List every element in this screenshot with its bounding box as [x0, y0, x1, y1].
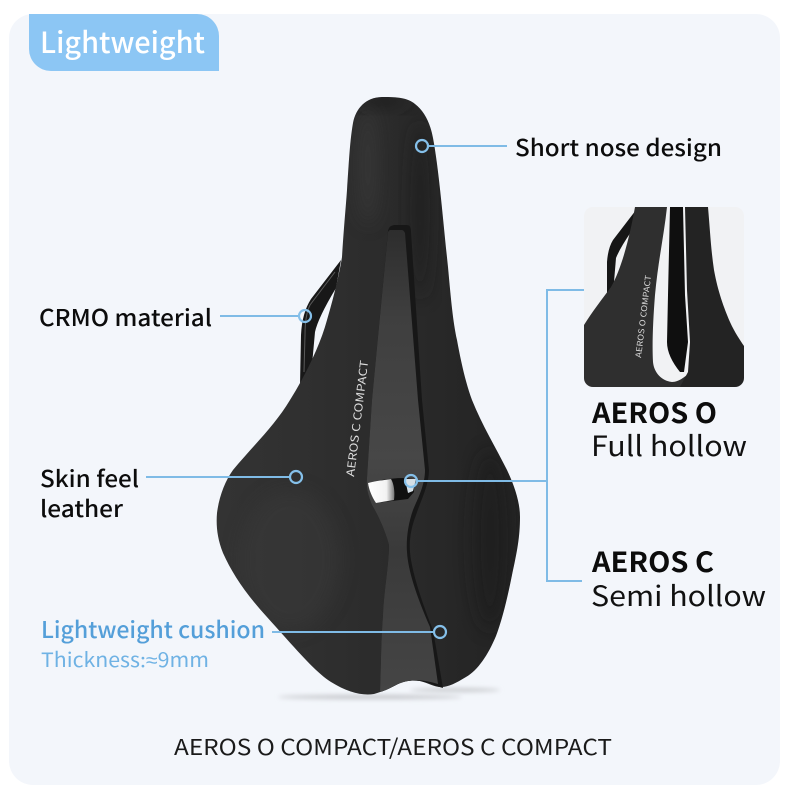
saddle model text: AEROS C COMPACT — [342, 359, 372, 477]
callout: lightweight cushion: Thickness: ≈9mm — [41, 644, 209, 673]
callout: short nose design — [416, 129, 722, 163]
callout: lightweight cushion: Lightweight cushion — [41, 611, 265, 645]
inset: AEROS O full hollow photo — [584, 207, 744, 387]
inset rail — [607, 212, 634, 292]
callout: short nose design: Short nose design — [515, 129, 722, 163]
callout bracket: hollow variants — [405, 290, 584, 581]
callout: skin feel leather: Skin feel — [40, 460, 139, 494]
callout: CRMO material: CRMO material — [39, 299, 212, 333]
label: AEROS C semi hollow: AEROS C — [591, 541, 714, 581]
inset left shell — [584, 207, 690, 387]
saddle shell — [216, 97, 520, 694]
inset model text: AEROS O COMPACT — [633, 274, 654, 358]
centre channel — [367, 225, 443, 692]
callout: CRMO material — [39, 299, 311, 333]
saddle shadow — [278, 695, 462, 699]
label: AEROS C semi hollow: Semi hollow — [591, 575, 766, 615]
icon: saddle rail — [300, 260, 341, 385]
label: AEROS O full hollow — [591, 392, 747, 465]
label: AEROS C semi hollow — [591, 541, 766, 615]
tag: Lightweight: Lightweight — [40, 20, 206, 62]
label: AEROS O full hollow: Full hollow — [591, 425, 747, 465]
saddle illustration — [200, 90, 540, 710]
callout: skin feel leather — [40, 460, 302, 524]
tag: Lightweight — [29, 14, 219, 71]
callout: lightweight cushion — [41, 611, 446, 673]
hollow window — [368, 478, 414, 503]
caption: AEROS O COMPACT/AEROS C COMPACT — [174, 730, 612, 762]
inset centre strut — [667, 207, 688, 372]
callout: skin feel leather: leather — [40, 490, 124, 524]
label: AEROS O full hollow: AEROS O — [591, 392, 717, 432]
inset right shell — [680, 207, 744, 387]
